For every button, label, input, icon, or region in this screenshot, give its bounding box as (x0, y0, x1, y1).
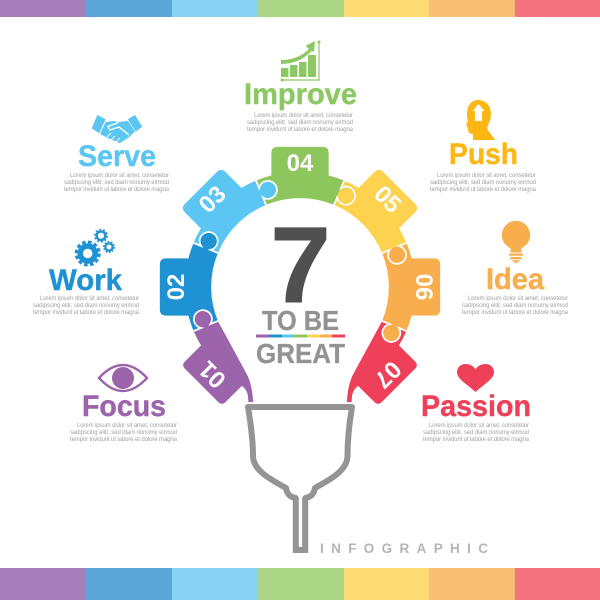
body text: tempor invidunt ut labore et dolore magna (64, 187, 170, 193)
puzzle piece 04 (256, 146, 355, 206)
bottom colour band (0, 568, 600, 600)
body text: Lorem ipsum dolor sit amet, consetetur (437, 173, 536, 179)
lamp base outline (248, 407, 352, 550)
heading: Improve (244, 78, 357, 111)
icon: growth chart (280, 40, 320, 82)
rainbow rule (256, 334, 345, 338)
puzzle piece 06 (381, 243, 441, 342)
body text: tempor invidunt ut labore et dolore magna (70, 437, 178, 443)
body text: sadipscing elitr, sed diam nonumy eirmod (462, 303, 568, 309)
body text: sadipscing elitr, sed diam nonumy eirmod (70, 430, 177, 436)
puzzle gear bulb (159, 146, 441, 405)
block: push (430, 100, 537, 193)
puzzle piece 03 (169, 148, 281, 261)
body text: Lorem ipsum dolor sit amet, consetetur (70, 173, 169, 179)
icon: head with arrow (466, 100, 495, 140)
body text (462, 296, 569, 316)
block: passion (421, 364, 531, 443)
puzzle piece 03: 03 (194, 181, 232, 219)
great: GREAT (256, 338, 345, 369)
body text (430, 173, 537, 193)
puzzle piece 04: 04 (287, 150, 314, 177)
puzzle piece 07: 07 (368, 355, 406, 393)
body text: tempor invidunt ut labore et dolore magna (33, 310, 140, 316)
body text: tempor invidunt ut labore et dolore magna (462, 310, 569, 316)
body text: Lorem ipsum dolor sit amet, consetetur (254, 113, 353, 119)
body text (247, 113, 354, 133)
top colour band (0, 0, 600, 17)
block: focus (70, 365, 178, 443)
icon: heart (457, 364, 494, 392)
central headline (256, 204, 345, 369)
body text: tempor invidunt ut labore et dolore magna (423, 437, 530, 443)
body text (70, 423, 178, 443)
body text: sadipscing elitr, sed diam nonumy eirmod (64, 180, 169, 186)
body text: sadipscing elitr, sed diam nonumy eirmod (247, 120, 353, 126)
infographic caption: INFOGRAPHIC (320, 541, 488, 556)
icon: handshake (92, 115, 142, 143)
to be: TO BE (262, 305, 339, 336)
block: idea (462, 221, 569, 316)
body text: Lorem ipsum dolor sit amet, consetetur (468, 296, 568, 302)
puzzle piece 07 (346, 321, 418, 405)
puzzle piece 06: 06 (410, 274, 437, 300)
heading: Push (449, 138, 518, 171)
block: serve (64, 115, 170, 193)
body text: Lorem ipsum dolor sit amet, consetetur (77, 423, 177, 429)
icon: light bulb (502, 221, 530, 264)
body text (64, 173, 170, 193)
icon: eye (99, 365, 147, 391)
body text (33, 296, 140, 316)
body text: sadipscing elitr, sed diam nonumy eirmod (33, 303, 139, 309)
puzzle piece 02 (159, 232, 219, 331)
big seven: 7 (270, 204, 331, 325)
heading: Passion (421, 390, 531, 423)
puzzle piece 01: 01 (194, 355, 232, 393)
icon: gears (76, 230, 114, 265)
heading: Focus (82, 390, 166, 423)
body text: tempor invidunt ut labore et dolore magna (430, 187, 537, 193)
body text: sadipscing elitr, sed diam nonumy eirmod (423, 430, 529, 436)
puzzle piece 05 (326, 156, 439, 268)
puzzle piece 01 (182, 310, 254, 405)
body text: Lorem ipsum dolor sit amet, consetetur (40, 296, 139, 302)
body text: sadipscing elitr, sed diam nonumy eirmod (430, 180, 536, 186)
puzzle piece 02: 02 (163, 274, 190, 300)
body text (423, 423, 530, 443)
block: work (33, 230, 140, 316)
heading: Idea (486, 263, 544, 296)
body text: tempor invidunt ut labore et dolore magna (247, 127, 354, 133)
heading: Work (49, 264, 122, 297)
puzzle piece 05: 05 (368, 181, 406, 219)
block: improve (244, 40, 357, 133)
body text: Lorem ipsum dolor sit amet, consetetur (429, 423, 529, 429)
heading: Serve (78, 140, 156, 173)
